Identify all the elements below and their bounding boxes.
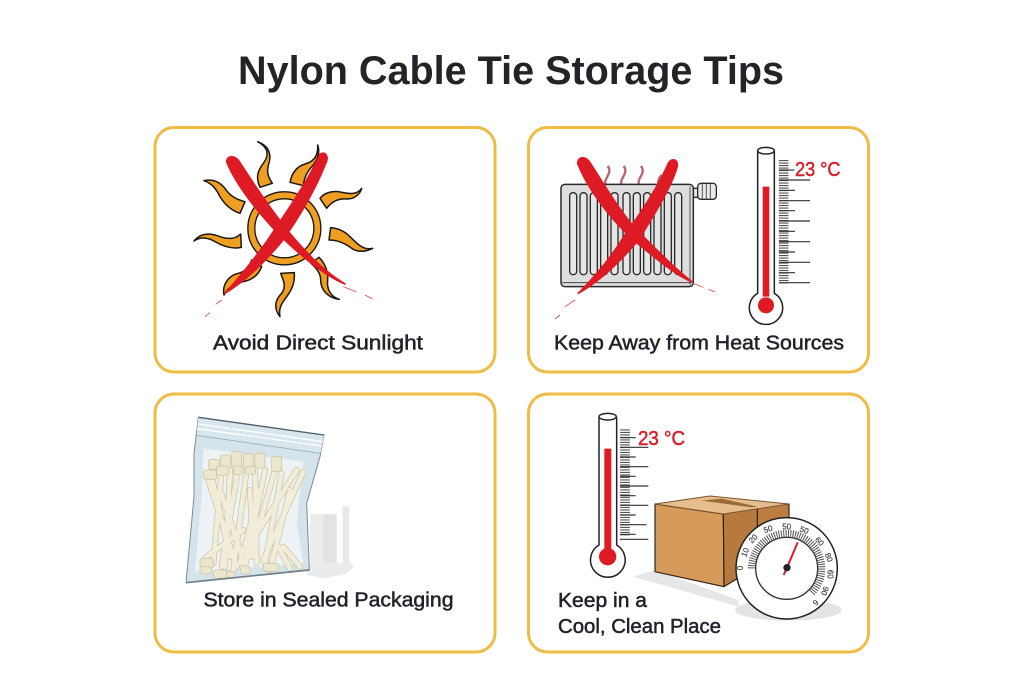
icon: sealed bag of cable ties <box>186 417 354 583</box>
label: keep in a cool, clean place <box>558 590 721 638</box>
panel: keep away from heat sources <box>528 128 868 372</box>
icon: crossed-out sun <box>194 142 373 317</box>
icon: crossed-out radiator <box>555 158 716 319</box>
panel: avoid direct sunlight <box>155 128 495 372</box>
label: store in sealed packaging: Store in Sealed Packaging <box>204 590 454 612</box>
icon: dial gauge: 90 <box>819 585 830 597</box>
icon: dial gauge <box>736 518 837 619</box>
icon: dial gauge: 6 <box>810 598 820 608</box>
label: keep away from heat sources: Keep Away from Heat Sources <box>554 332 844 354</box>
label: keep in a cool, clean place: Keep in a <box>558 590 648 612</box>
icon: dial gauge: 60 <box>826 570 835 579</box>
icon: cardboard box <box>633 496 842 621</box>
label: 23 degrees: 23 °C <box>638 428 685 450</box>
icon: dial gauge: 20 <box>747 532 760 545</box>
icon: dial gauge: 50 <box>798 525 810 536</box>
icon: dial gauge: 60 <box>813 535 826 548</box>
label: avoid direct sunlight: Avoid Direct Sunlight <box>213 332 423 354</box>
label: 23 degrees: 23 °C <box>795 159 840 181</box>
icon: dial gauge: 50 <box>762 523 774 535</box>
icon: dial gauge: 0 <box>736 565 745 570</box>
label: keep in a cool, clean place: Cool, Clean Place <box>558 616 721 638</box>
icon: thermometer with scale <box>590 413 648 577</box>
icon: thermometer with scale <box>749 147 810 324</box>
icon: dial gauge: 10 <box>740 546 751 558</box>
panel: store in sealed packaging <box>155 394 495 652</box>
icon: dial gauge: 50 <box>782 522 792 531</box>
icon: dial gauge: 80 <box>823 552 835 564</box>
title: Nylon Cable Tie Storage Tips <box>238 49 784 93</box>
panel: keep in a cool, clean place <box>528 394 868 652</box>
